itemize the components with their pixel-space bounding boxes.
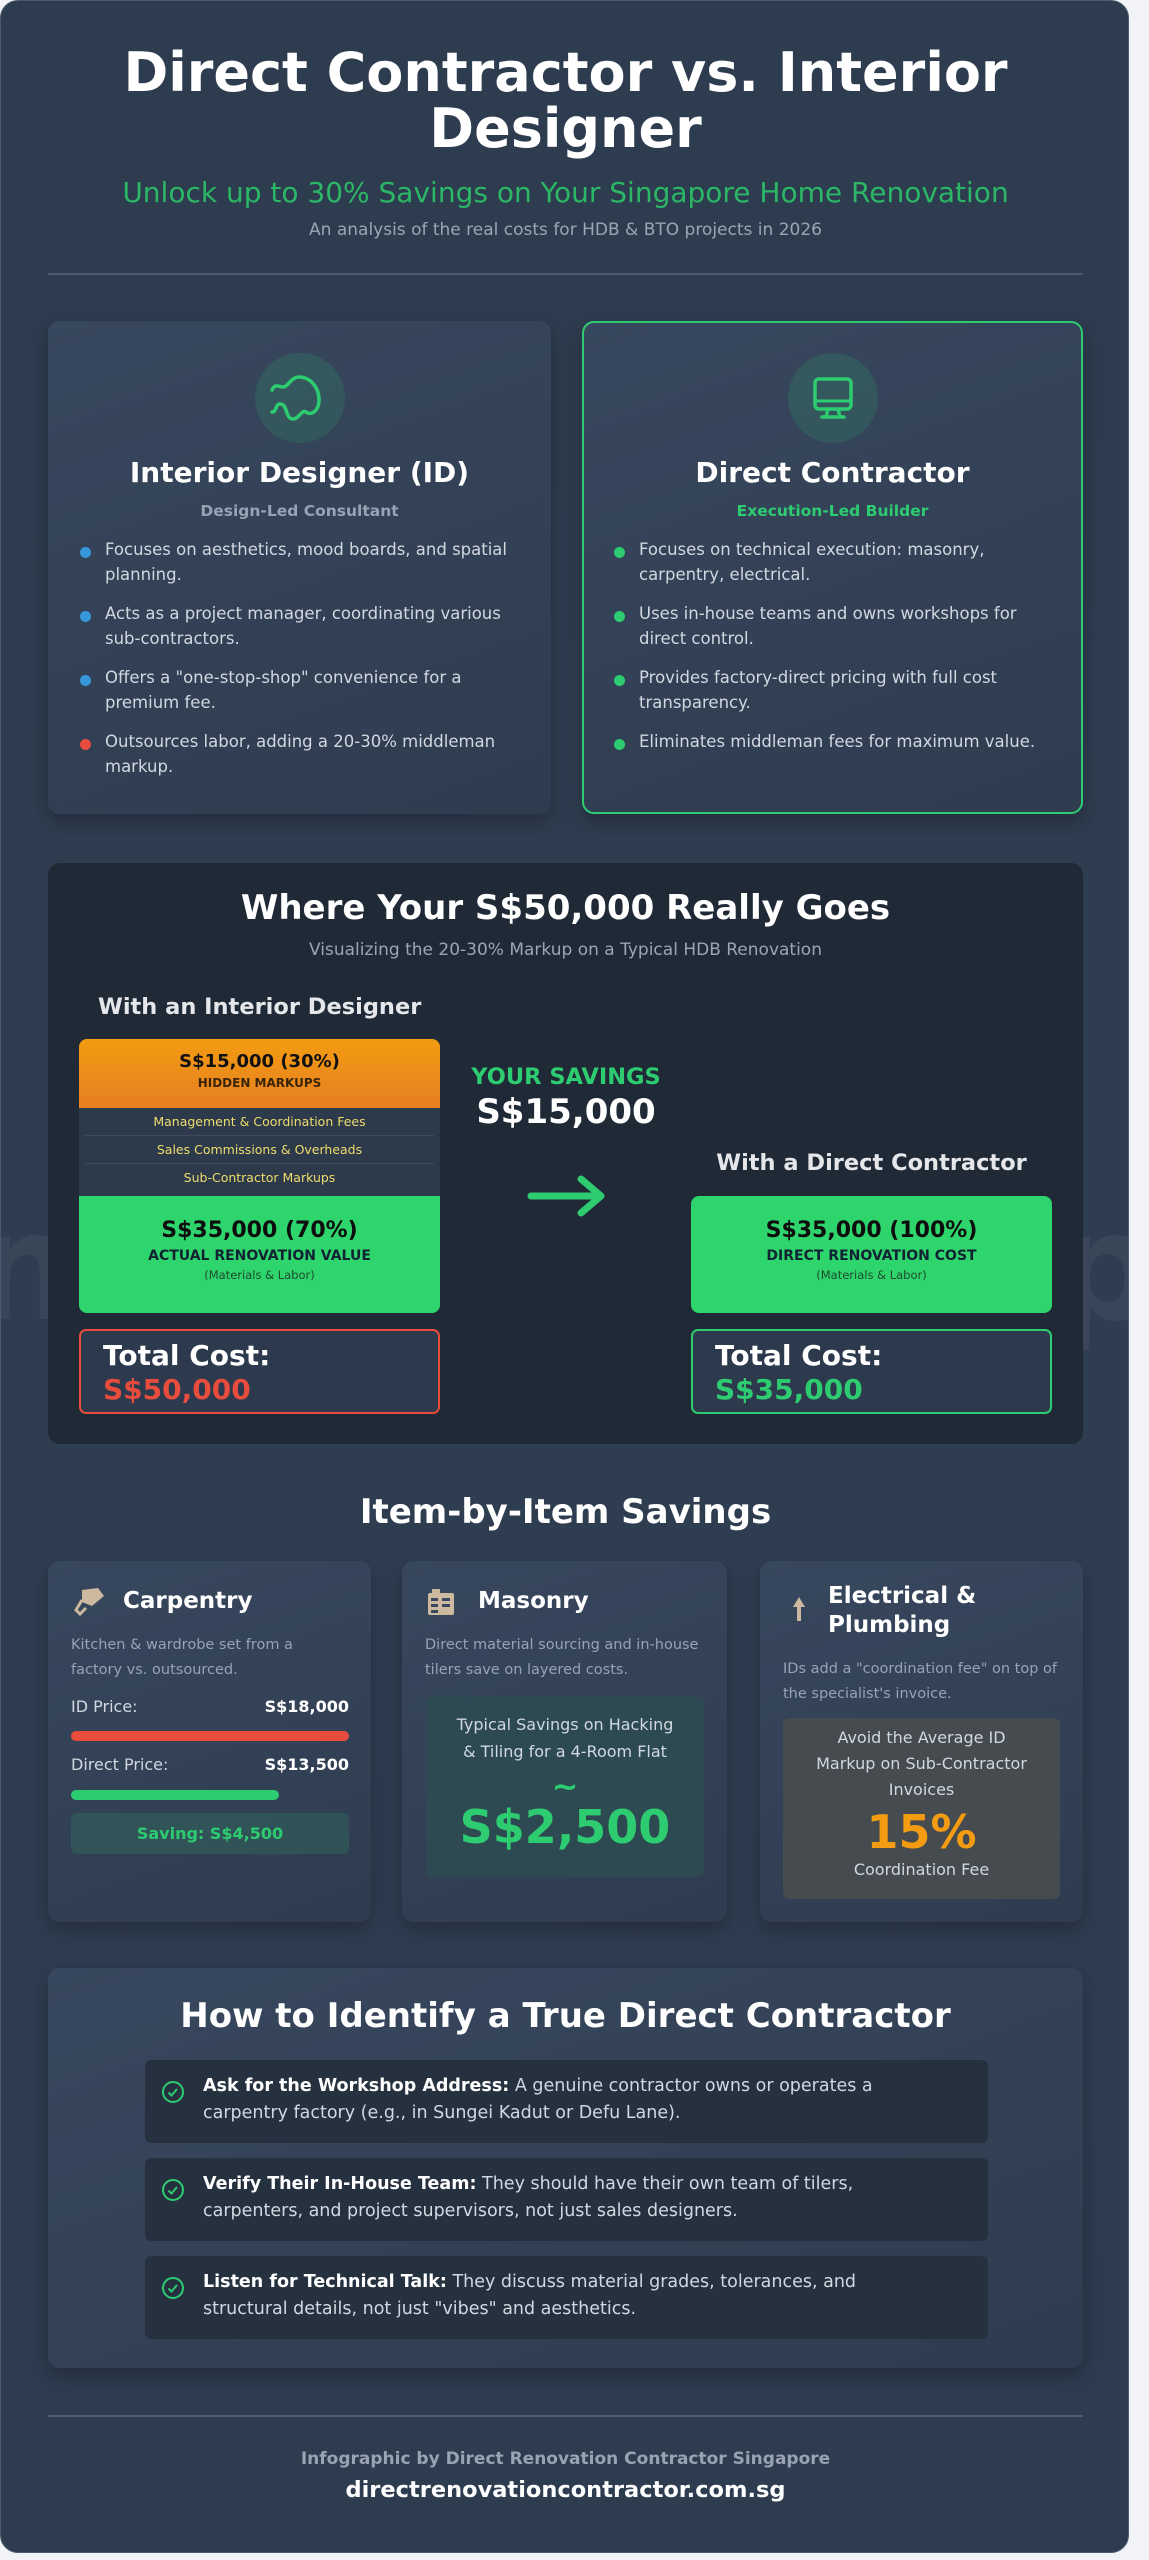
price rows — [71, 1697, 349, 1716]
stat box: Markup on Sub-Contractor — [816, 1754, 1027, 1773]
title: Direct Contractor vs. Interior — [123, 41, 1008, 104]
heading: Direct Contractor — [695, 456, 970, 489]
total: DC — [691, 1329, 1052, 1414]
stacked bar: ID: S$35,000 (70%) — [161, 1218, 358, 1243]
list: ID bullets: Focuses on aesthetics, mood boards, and spatial planning. — [105, 540, 507, 584]
total: DC: Total Cost: — [715, 1339, 882, 1372]
saving badge: Saving: S$4,500 — [137, 1824, 283, 1843]
tip 2: Verify Their In-House Team: They should have their own team of tilers, carpenters, and project supervisors, not just sales designers. — [203, 2174, 853, 2221]
arrow — [528, 1176, 604, 1216]
subheading: Visualizing the 20-30% Markup on a Typical HDB Renovation — [309, 940, 822, 960]
label: with DC: With a Direct Contractor — [716, 1150, 1027, 1176]
heading: Interior Designer (ID) — [130, 456, 469, 489]
stat box: 15% — [866, 1805, 977, 1859]
heading: Plumbing — [828, 1612, 950, 1638]
stacked bar: ID: Sales Commissions & Overheads — [157, 1142, 362, 1157]
list: DC bullets: Uses in-house teams and owns workshops for direct control. — [639, 604, 1017, 648]
panel: how to identify — [48, 1968, 1083, 2368]
watermark text — [0, 1181, 1129, 1355]
stat box: Avoid the Average ID — [837, 1728, 1006, 1747]
stacked bar: ID: ACTUAL RENOVATION VALUE — [148, 1248, 371, 1264]
list: DC bullets: Focuses on technical execution: masonry, carpentry, electrical. — [639, 540, 984, 584]
stacked bar: ID: HIDDEN MARKUPS — [198, 1076, 321, 1090]
total: DC: S$35,000 — [715, 1373, 863, 1406]
heading: Carpentry — [123, 1588, 253, 1614]
tip 1 — [145, 2060, 988, 2143]
tip 1: Ask for the Workshop Address: A genuine contractor owns or operates a carpentry factory (e.g., in Sungei Kadut or Defu Lane). — [203, 2076, 873, 2123]
panel: direct contractor — [582, 321, 1083, 814]
saving badge — [71, 1813, 349, 1854]
subtitle: Unlock up to 30% Savings on Your Singapore Home Renovation — [122, 176, 1009, 209]
icon: monitor — [788, 353, 878, 443]
panel: electrical — [760, 1561, 1083, 1922]
callout: savings — [471, 1064, 661, 1132]
total: ID: Total Cost: — [103, 1339, 270, 1372]
list: ID bullets: Outsources labor, adding a 20-30% middleman markup. — [105, 732, 495, 776]
panel: masonry — [402, 1561, 727, 1922]
stat box: S$2,500 — [460, 1800, 670, 1854]
panel: carpentry: S$13,500 — [265, 1755, 349, 1774]
price rows: ID Price: — [71, 1697, 138, 1716]
panel: carpentry — [48, 1561, 371, 1922]
stat box: Invoices — [889, 1780, 954, 1799]
list: DC bullets: Eliminates middleman fees for maximum value. — [639, 732, 1035, 751]
heading: Electrical & — [828, 1583, 976, 1609]
description: IDs add a "coordination fee" on top of the specialist's invoice. — [783, 1661, 1057, 1702]
list: ID bullets — [80, 540, 507, 776]
panel: carpentry: Direct Price: — [71, 1755, 168, 1774]
tagline: Execution-Led Builder — [737, 502, 928, 520]
heading: item-by-item: Item-by-Item Savings — [360, 1492, 771, 1532]
list: DC bullets: Provides factory-direct pricing with full cost transparency. — [639, 668, 997, 712]
heading: How to Identify a True Direct Contractor — [180, 1996, 951, 2036]
title: Designer — [429, 97, 702, 160]
tip 2 — [145, 2158, 988, 2241]
stat box: Coordination Fee — [854, 1860, 989, 1879]
tip 3: Listen for Technical Talk: They discuss material grades, tolerances, and structural details, not just "vibes" and aesthetics. — [203, 2272, 856, 2319]
stacked bar: ID: S$15,000 (30%) — [179, 1051, 340, 1072]
icon: brain — [255, 353, 345, 443]
heading: Masonry — [478, 1588, 589, 1614]
list: ID bullets: Acts as a project manager, coordinating various sub-contractors. — [105, 604, 501, 648]
description: Kitchen & wardrobe set from a factory vs. outsourced. — [71, 1637, 293, 1678]
icon: building — [428, 1589, 454, 1615]
stat box: ~ — [552, 1767, 578, 1805]
panel: where your money goes — [48, 863, 1083, 1444]
total: ID — [79, 1329, 440, 1414]
tagline: Design-Led Consultant — [200, 502, 399, 520]
stacked bar: ID — [79, 1039, 440, 1313]
footer credit: Infographic by Direct Renovation Contractor Singapore — [301, 2449, 830, 2469]
intro text: An analysis of the real costs for HDB & BTO projects in 2026 — [309, 220, 822, 240]
total: ID: S$50,000 — [103, 1373, 251, 1406]
stat box — [426, 1697, 704, 1877]
stacked bar: ID: Management & Coordination Fees — [153, 1114, 366, 1129]
tip 3 — [145, 2256, 988, 2339]
list: DC bullets — [614, 540, 1035, 751]
label: with ID: With an Interior Designer — [98, 994, 421, 1020]
price rows: S$18,000 — [265, 1697, 349, 1716]
icon: carpentry — [74, 1588, 104, 1616]
footer url: directrenovationcontractor.com.sg — [345, 2477, 786, 2503]
bar: DC: S$35,000 (100%) — [766, 1218, 977, 1243]
icon: arrow up — [793, 1597, 805, 1621]
heading: Where Your S$50,000 Really Goes — [241, 888, 890, 928]
callout: savings: YOUR SAVINGS — [471, 1064, 661, 1090]
description: Direct material sourcing and in-house tilers save on layered costs. — [425, 1637, 698, 1678]
heading — [828, 1583, 976, 1638]
bar: DC: (Materials & Labor) — [816, 1268, 927, 1282]
stat box — [783, 1718, 1060, 1899]
bar: DC: DIRECT RENOVATION COST — [766, 1248, 977, 1264]
bar: DC — [691, 1196, 1052, 1313]
title — [123, 41, 1008, 160]
stacked bar: ID: Sub-Contractor Markups — [184, 1170, 335, 1185]
list: ID bullets: Offers a "one-stop-shop" convenience for a premium fee. — [105, 668, 461, 712]
panel: interior designer — [48, 321, 551, 814]
stat box: & Tiling for a 4-Room Flat — [463, 1742, 667, 1761]
stacked bar: ID: (Materials & Labor) — [204, 1268, 315, 1282]
stat box: Typical Savings on Hacking — [457, 1715, 673, 1734]
callout: savings: S$15,000 — [476, 1092, 656, 1132]
